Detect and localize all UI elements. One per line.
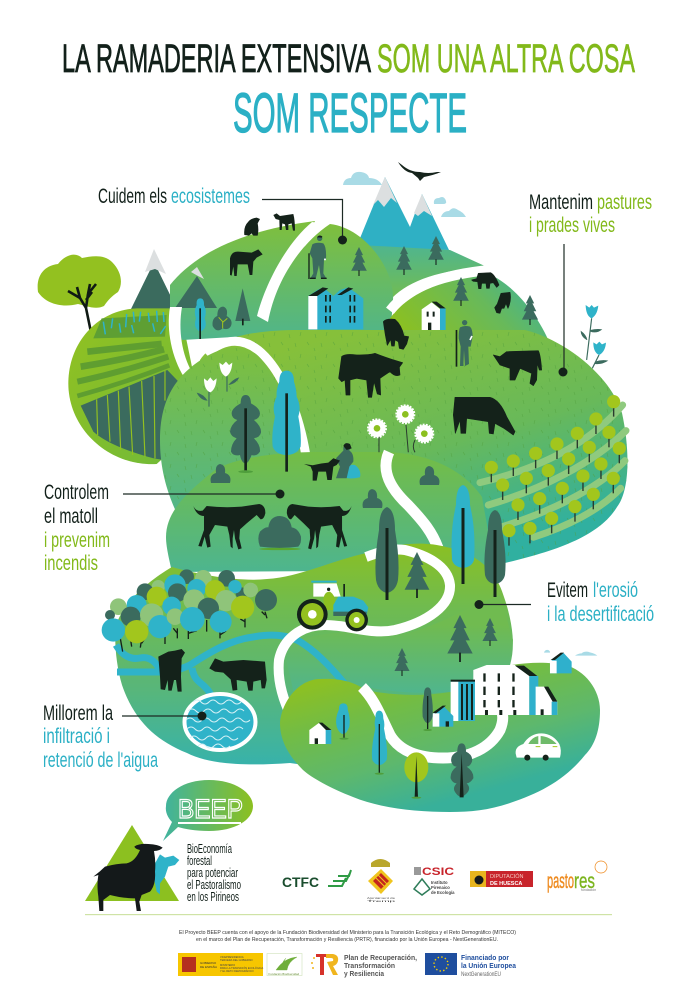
top hill with shepherd bbox=[262, 224, 393, 340]
vineyard bbox=[480, 395, 626, 546]
main pasture bbox=[200, 330, 627, 563]
pastores logo: res bbox=[574, 870, 595, 893]
callout: ecosistemes bbox=[98, 185, 347, 244]
CSIC logo: Pirenaico bbox=[431, 885, 450, 890]
callout: aigua bbox=[43, 702, 206, 772]
cow 1 bbox=[339, 353, 403, 397]
sheep group bbox=[93, 844, 179, 911]
project text: BioEconomía bbox=[187, 841, 232, 856]
tulips bbox=[197, 362, 239, 407]
speech bubble: BEEP bbox=[178, 794, 243, 824]
callout: erosio: Evitem bbox=[547, 579, 588, 602]
callout: pastures: i prades vives bbox=[529, 214, 615, 237]
CSIC logo: Instituto bbox=[431, 880, 448, 885]
sheep, cows and shepherd on top-left hill bbox=[230, 213, 327, 279]
triangle bbox=[85, 825, 179, 901]
big white building bbox=[473, 665, 538, 715]
project text: en los Pirineos bbox=[187, 889, 239, 904]
callout: matoll: i prevenim bbox=[44, 529, 110, 552]
callout: aigua: retenció de l'aigua bbox=[43, 749, 158, 772]
second dark mountain and top-left hill bbox=[170, 221, 315, 340]
tower bbox=[451, 680, 475, 721]
EU logo bbox=[425, 953, 517, 978]
PRTR logo: Transformación bbox=[344, 961, 395, 970]
dark poplar right bbox=[484, 510, 506, 597]
callout: matoll bbox=[44, 481, 284, 575]
Diputacion logo: DIPUTACIÓN bbox=[490, 873, 524, 880]
left field bbox=[68, 308, 193, 464]
center bush and goats bbox=[193, 504, 352, 550]
clouds bbox=[544, 650, 597, 656]
main road bbox=[279, 549, 450, 718]
callout: matoll: el matoll bbox=[44, 505, 98, 528]
Tremp crest bbox=[367, 859, 396, 903]
mid-left hill bbox=[160, 347, 300, 520]
sheep bbox=[244, 218, 260, 236]
white road left bbox=[169, 307, 192, 377]
tree crown and left tree bbox=[38, 255, 121, 342]
icon: bird bbox=[398, 162, 441, 181]
Tremp crest: Tremp bbox=[367, 899, 396, 903]
Diputacion logo: DE HUESCA bbox=[490, 881, 522, 887]
tree cluster bbox=[102, 569, 277, 652]
pastores logo: pasto bbox=[547, 870, 574, 893]
road in bottom hill bbox=[362, 687, 503, 758]
project text: forestal bbox=[187, 853, 212, 868]
pines top bbox=[351, 236, 538, 325]
partner logos bbox=[282, 859, 607, 903]
dark poplar bbox=[375, 507, 399, 600]
cow 3 bbox=[453, 397, 515, 435]
pastores logo: fundación bbox=[581, 888, 596, 892]
cow 6 bbox=[495, 292, 511, 313]
title line 1: LA RAMADERIA EXTENSIVA bbox=[62, 37, 371, 81]
small building bbox=[536, 687, 557, 715]
funding text bbox=[179, 930, 516, 943]
clouds bbox=[343, 172, 466, 217]
black sheep bbox=[93, 844, 163, 911]
callout: pastures: pastures bbox=[597, 191, 652, 214]
landscape illustration bbox=[38, 162, 627, 812]
dark poplar small bbox=[422, 687, 433, 731]
pines lower bbox=[394, 615, 498, 676]
blue tulips bbox=[581, 305, 608, 368]
CTFC logo bbox=[282, 870, 351, 890]
road middle bbox=[206, 341, 306, 456]
poplars and pine middle bbox=[375, 485, 506, 600]
funding text: en el marco del Plan de Recuperación, Transformación y Resiliencia (PRTR), financiado por la Unión Europea - NextGenerationEU. bbox=[196, 937, 498, 943]
blue sheep bbox=[154, 854, 179, 894]
BEEP logo bbox=[85, 780, 253, 911]
Spanish government logo: DE ESPAÑA bbox=[200, 964, 217, 969]
cow 2 bbox=[493, 351, 542, 386]
center hill bbox=[166, 452, 495, 572]
woman and dog bbox=[304, 443, 360, 481]
cow small bbox=[273, 213, 295, 231]
speech bubble bbox=[163, 780, 253, 841]
white road top bbox=[257, 222, 328, 322]
title line 2: SOM RESPECTE bbox=[233, 81, 467, 144]
lime tree bbox=[404, 752, 428, 799]
vine trees bbox=[485, 395, 626, 546]
callouts bbox=[43, 185, 654, 772]
blue poplar bbox=[452, 485, 474, 584]
Spanish government logo: PARA LA TRANSICIÓN ECOLÓGICA bbox=[220, 965, 264, 970]
project text bbox=[187, 841, 241, 904]
callout: erosio bbox=[474, 579, 654, 626]
callout: erosio: l'erosió bbox=[593, 579, 638, 602]
project text: para potenciar bbox=[187, 865, 238, 880]
cow 4 bbox=[383, 319, 409, 349]
separator line bbox=[85, 914, 612, 915]
car bbox=[516, 733, 561, 761]
dark mountains bbox=[131, 249, 177, 309]
Spanish government logo: VICEPRESIDENCIA bbox=[220, 955, 244, 959]
small trees top-left bbox=[195, 288, 250, 339]
pond bbox=[184, 694, 256, 750]
bush with branches bbox=[212, 307, 232, 330]
Spanish government logo: MINISTERIO bbox=[220, 963, 235, 967]
EU logo: NextGenerationEU bbox=[461, 972, 501, 978]
callout: pastures: Mantenim bbox=[529, 191, 593, 214]
left house bbox=[309, 723, 331, 744]
goat left bbox=[193, 504, 265, 549]
lower hill bbox=[115, 544, 513, 770]
callout: pastures bbox=[529, 191, 652, 376]
Spanish government logo bbox=[178, 953, 264, 976]
inner field under road bbox=[284, 595, 513, 720]
callout: aigua: infiltració i bbox=[43, 725, 110, 748]
lower cows bbox=[158, 649, 267, 692]
EU logo: la Unión Europea bbox=[461, 961, 517, 970]
callout: ecosistemes: ecosistemes bbox=[171, 185, 250, 208]
cow 5 bbox=[472, 273, 499, 289]
bottom hill scene bbox=[309, 650, 597, 799]
EU logo: Financiado por bbox=[461, 953, 509, 962]
callout: ecosistemes: Cuidem els bbox=[98, 185, 167, 208]
Tremp crest: Ajuntament de bbox=[367, 896, 395, 900]
title bbox=[62, 37, 635, 144]
blue tree bbox=[195, 298, 206, 339]
Fundacion Biodiversidad logo: Fundación Biodiversidad bbox=[268, 972, 300, 976]
house top right bbox=[550, 653, 572, 673]
small house bbox=[433, 706, 453, 727]
pastores logo bbox=[547, 861, 607, 893]
river bbox=[116, 635, 350, 696]
CTFC logo: CTFC bbox=[282, 875, 319, 890]
funding text: El Proyecto BEEP cuenta con el apoyo de la Fundación Biodiversidad del Ministerio para la Transición Ecológica y el Reto Demográfico (MITECO) bbox=[179, 930, 516, 936]
oak tree bbox=[230, 395, 261, 473]
daisies bbox=[368, 406, 433, 452]
cow bbox=[230, 249, 263, 276]
blue poplar bbox=[272, 371, 301, 472]
white tulips and mid trees bbox=[197, 362, 301, 473]
vine rows bbox=[480, 405, 626, 537]
cows upper bbox=[339, 273, 542, 435]
callout: matoll: Controlem bbox=[44, 481, 109, 504]
PRTR logo: Plan de Recuperación, bbox=[344, 953, 417, 962]
bottom right hill bbox=[280, 663, 600, 812]
Fundacion Biodiversidad logo bbox=[267, 954, 302, 976]
callout: matoll: incendis bbox=[44, 552, 98, 575]
back right hill bbox=[360, 245, 487, 320]
PRTR logo bbox=[311, 953, 417, 978]
teal mountains bbox=[356, 177, 449, 250]
callout: aigua: Millorem la bbox=[43, 702, 113, 725]
Spanish government logo: GOBIERNO bbox=[200, 961, 217, 965]
oak dark bbox=[451, 743, 473, 797]
white house top bbox=[422, 302, 446, 330]
CSIC logo: de Ecología bbox=[431, 890, 455, 895]
funder logos bbox=[178, 953, 517, 978]
Diputacion logo bbox=[470, 871, 533, 887]
blue poplar tall bbox=[372, 711, 387, 775]
bushes bbox=[211, 464, 439, 508]
PRTR logo: y Resiliencia bbox=[344, 969, 385, 978]
blue tree small bbox=[336, 703, 350, 740]
icon: shepherd top bbox=[308, 236, 327, 279]
Spanish government logo: Y EL RETO DEMOGRÁFICO bbox=[220, 969, 254, 973]
blue building bbox=[308, 287, 363, 329]
shepherd right bbox=[456, 320, 473, 367]
dark triangle tree bbox=[235, 288, 250, 325]
CSIC logo bbox=[414, 866, 455, 895]
hill 3 with road bbox=[390, 270, 548, 340]
project text: el Pastoralismo bbox=[187, 877, 241, 892]
CSIC logo: CSIC bbox=[422, 866, 454, 878]
Spanish government logo: TERCERA DEL GOBIERNO bbox=[220, 958, 253, 962]
goat right bbox=[287, 504, 352, 549]
road center bbox=[386, 452, 438, 548]
icon: tractor bbox=[297, 581, 368, 631]
